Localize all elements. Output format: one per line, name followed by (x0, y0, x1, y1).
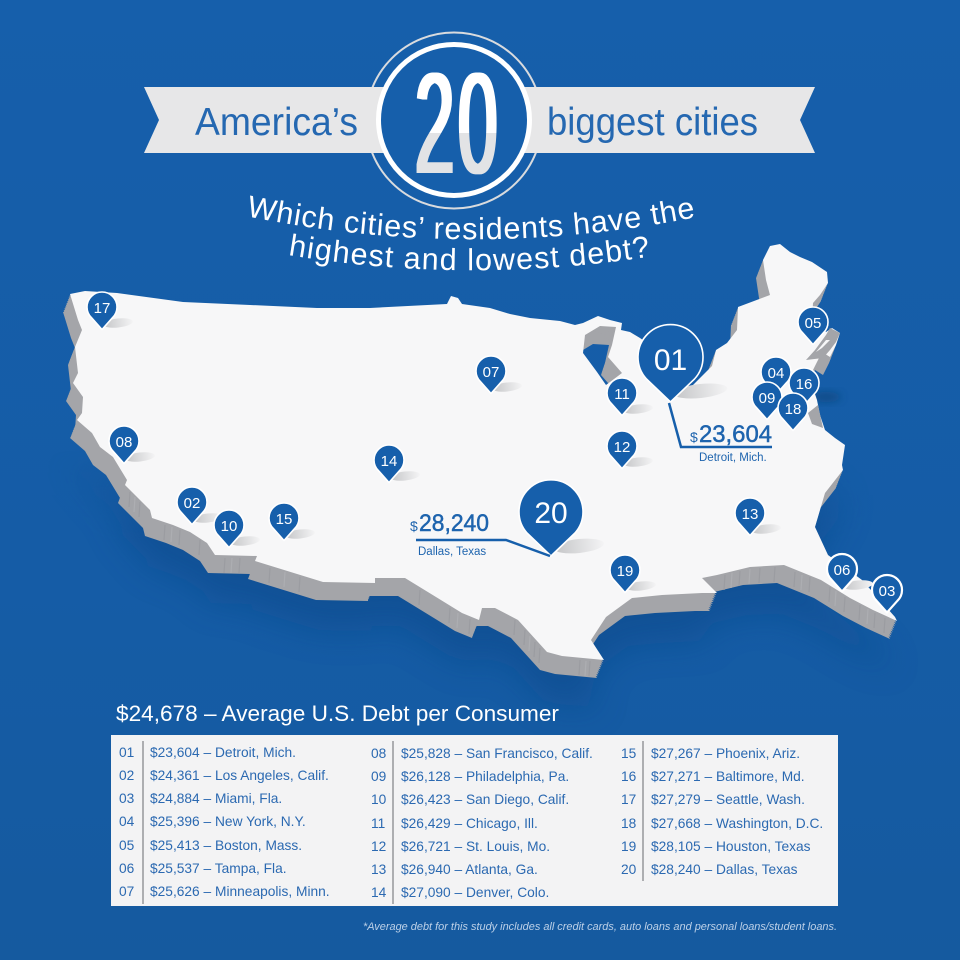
column 1 list: $23,604 – Detroit, Mich. (150, 745, 296, 760)
biggest cities: biggest cities (547, 101, 758, 144)
column 3 list: 16 (621, 769, 637, 784)
pin 17: 17 (94, 300, 110, 317)
callout: Detroit: $ (690, 429, 698, 445)
ribbon band (144, 87, 815, 153)
pin 15 (269, 503, 315, 540)
pin 08: 08 (116, 434, 132, 451)
column 2 list: $25,828 – San Francisco, Calif. (401, 746, 593, 761)
pin 02 (177, 487, 223, 524)
pin 14 (374, 445, 420, 482)
pin 05 (798, 307, 828, 344)
pin 16 (789, 368, 819, 406)
callout: Dallas: Dallas, Texas (418, 546, 486, 558)
pin 08 (109, 426, 155, 464)
subtitle question: highest and lowest debt? (290, 234, 648, 270)
Chesapeake inlet (808, 405, 823, 428)
wall striations (129, 492, 885, 676)
callout: Detroit: Detroit, Mich. (699, 452, 767, 464)
column 3 list: 19 (621, 839, 636, 854)
pin 01 large: 01 (654, 344, 687, 377)
pin 18 (778, 393, 808, 430)
badge circle (378, 44, 530, 196)
column 3 list: 17 (621, 792, 636, 807)
column 2 list (371, 741, 593, 904)
map pins (87, 292, 902, 612)
pin 06: 06 (834, 562, 850, 579)
pin 04 (761, 357, 791, 394)
column 2 list: 09 (371, 769, 386, 784)
column 1 list: $25,396 – New York, N.Y. (150, 814, 306, 829)
pin 20 large: 20 (534, 497, 568, 530)
pin 01 large (638, 325, 728, 402)
column 1 list: $25,413 – Boston, Mass. (150, 838, 302, 853)
column 1 list: 07 (119, 884, 134, 899)
callout: Dallas: $ (410, 518, 418, 534)
column 1 list: 03 (119, 791, 135, 806)
footnote: *Average debt for this study includes all credit cards, auto loans and personal loans/student loans. (363, 921, 837, 933)
pin 19: 19 (617, 563, 633, 580)
subtitle question: Which cities’ residents have the (250, 196, 694, 240)
map shadow (118, 506, 846, 702)
column 1 list: $25,626 – Minneapolis, Minn. (150, 884, 330, 899)
legend panel (111, 735, 838, 906)
pin 10: 10 (221, 518, 237, 535)
map extrusion wall (63, 246, 896, 678)
pin 17 (87, 292, 133, 330)
column 1 list: $25,537 – Tampa, Fla. (150, 861, 287, 876)
pin 09: 09 (759, 390, 775, 407)
pin 15: 15 (276, 511, 292, 528)
column 2 list: $26,940 – Atlanta, Ga. (401, 862, 538, 877)
big number 20: 20 (415, 43, 497, 205)
column 1 list: $24,361 – Los Angeles, Calif. (150, 768, 329, 783)
pin 02: 02 (184, 495, 200, 512)
column 2 list: $26,721 – St. Louis, Mo. (401, 839, 550, 854)
pin 03 (872, 575, 902, 612)
pin 11: 11 (614, 386, 630, 403)
dark coastal shadow (811, 392, 841, 402)
column 1 list: 02 (119, 768, 134, 783)
column 2 list: $26,128 – Philadelphia, Pa. (401, 769, 569, 784)
pin 09 (752, 382, 782, 420)
pin 07 (476, 356, 522, 394)
callout: Dallas: 28,240 (419, 510, 489, 537)
column 1 list: 01 (119, 745, 134, 760)
column 3 list: $27,271 – Baltimore, Md. (651, 769, 805, 784)
outer ring (366, 32, 542, 208)
column 3 list: $28,240 – Dallas, Texas (651, 862, 798, 877)
column 1 list: $24,884 – Miami, Fla. (150, 791, 282, 806)
United States map (63, 244, 897, 678)
pin 12: 12 (614, 439, 630, 456)
column 2 list: 14 (371, 885, 387, 900)
column 3 list: $27,279 – Seattle, Wash. (651, 792, 805, 807)
pin 05: 05 (805, 315, 821, 332)
column 2 list: 10 (371, 792, 387, 807)
column 3 list: 15 (621, 746, 637, 761)
column 2 list: 11 (371, 816, 385, 831)
legend heading: $24,678 – Average U.S. Debt per Consumer (116, 701, 559, 726)
pin 14: 14 (381, 453, 397, 470)
column 1 list: 05 (119, 838, 135, 853)
column 2 list: $27,090 – Denver, Colo. (401, 885, 549, 900)
column 3 list: $27,267 – Phoenix, Ariz. (651, 746, 800, 761)
column 2 list: 08 (371, 746, 387, 761)
column 3 list: 20 (621, 862, 637, 877)
column 3 list: $28,105 – Houston, Texas (651, 839, 811, 854)
pin 07: 07 (483, 364, 499, 381)
column 2 list: $26,429 – Chicago, Ill. (401, 816, 538, 831)
column 2 list: 12 (371, 839, 386, 854)
callout: Detroit (669, 403, 772, 464)
column 1 list: 06 (119, 861, 135, 876)
column 3 list: $27,668 – Washington, D.C. (651, 816, 823, 831)
Cape Cod inlet (806, 328, 840, 360)
pin 19 (610, 555, 656, 592)
column 2 list: $26,423 – San Diego, Calif. (401, 792, 569, 807)
map top surface (70, 244, 897, 660)
pin 12 (607, 431, 653, 468)
callout: Detroit: 23,604 (699, 421, 772, 448)
subtitle question (250, 196, 694, 270)
column 1 list (119, 741, 330, 904)
pin 06 (827, 554, 873, 592)
panel background (111, 735, 838, 906)
pin 03: 03 (879, 583, 895, 600)
pin 18: 18 (785, 401, 801, 418)
column 1 list: 04 (119, 814, 135, 829)
pin 04: 04 (768, 365, 784, 382)
pin 13 (735, 498, 781, 536)
America's: America’s (195, 101, 358, 144)
title ribbon (144, 32, 815, 208)
column 2 list: 13 (371, 862, 387, 877)
column 3 list (621, 741, 823, 881)
pin 16: 16 (796, 376, 812, 393)
pin 10 (214, 510, 260, 548)
pin 11 (607, 378, 653, 416)
pin 20 large (519, 480, 605, 556)
callout: Dallas (410, 510, 550, 558)
pin 13: 13 (742, 506, 758, 523)
column 3 list: 18 (621, 816, 637, 831)
